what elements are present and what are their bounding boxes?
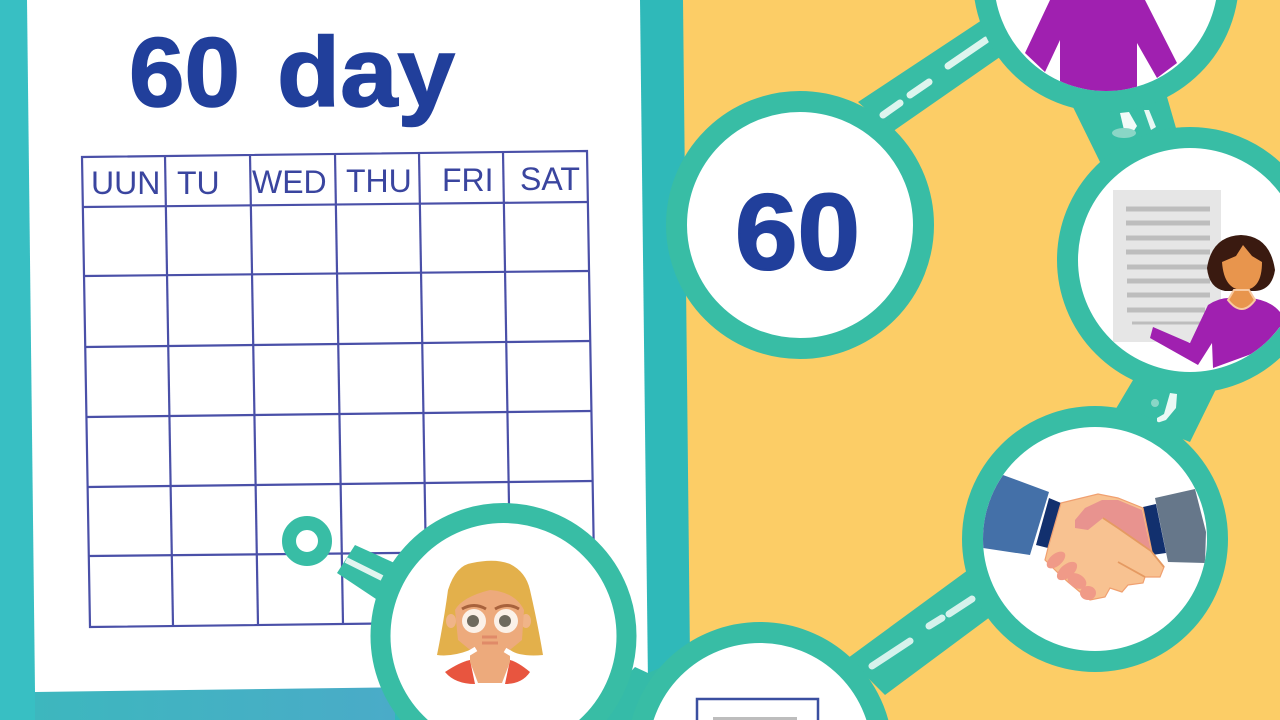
connector: ring to woman circle [289, 523, 410, 605]
calendar weekday headers [93, 167, 580, 194]
calendar weekday headers: FRI [442, 162, 494, 198]
circle: handshake [972, 416, 1218, 662]
calendar weekday headers: UUN [91, 165, 160, 201]
connector: woman circle to bottom circle [607, 667, 659, 720]
calendar weekday headers: WED [252, 164, 327, 200]
connector: 60 circle to top circle [858, 21, 999, 130]
connector: document circle to handshake circle [1116, 380, 1216, 442]
calendar weekday headers: TU [177, 165, 220, 201]
connector: top circle to document circle [1073, 97, 1176, 162]
circle: 60 [676, 102, 924, 348]
circle: document and presenter [1068, 138, 1280, 382]
circle: bottom document [638, 632, 882, 720]
calendar weekday headers: THU [346, 163, 412, 199]
title: 60 [129, 17, 240, 127]
calendar grid [82, 151, 595, 627]
calendar weekday headers: SAT [520, 161, 580, 197]
circle: person in purple [984, 0, 1228, 102]
circle: woman with glasses [380, 513, 626, 720]
title [132, 34, 456, 128]
connector: handshake circle to bottom circle [848, 570, 990, 695]
calendar sheet [27, 0, 648, 692]
circle: 60: 60 [735, 171, 860, 292]
teal calendar frame [0, 0, 690, 720]
title: day [277, 17, 455, 127]
